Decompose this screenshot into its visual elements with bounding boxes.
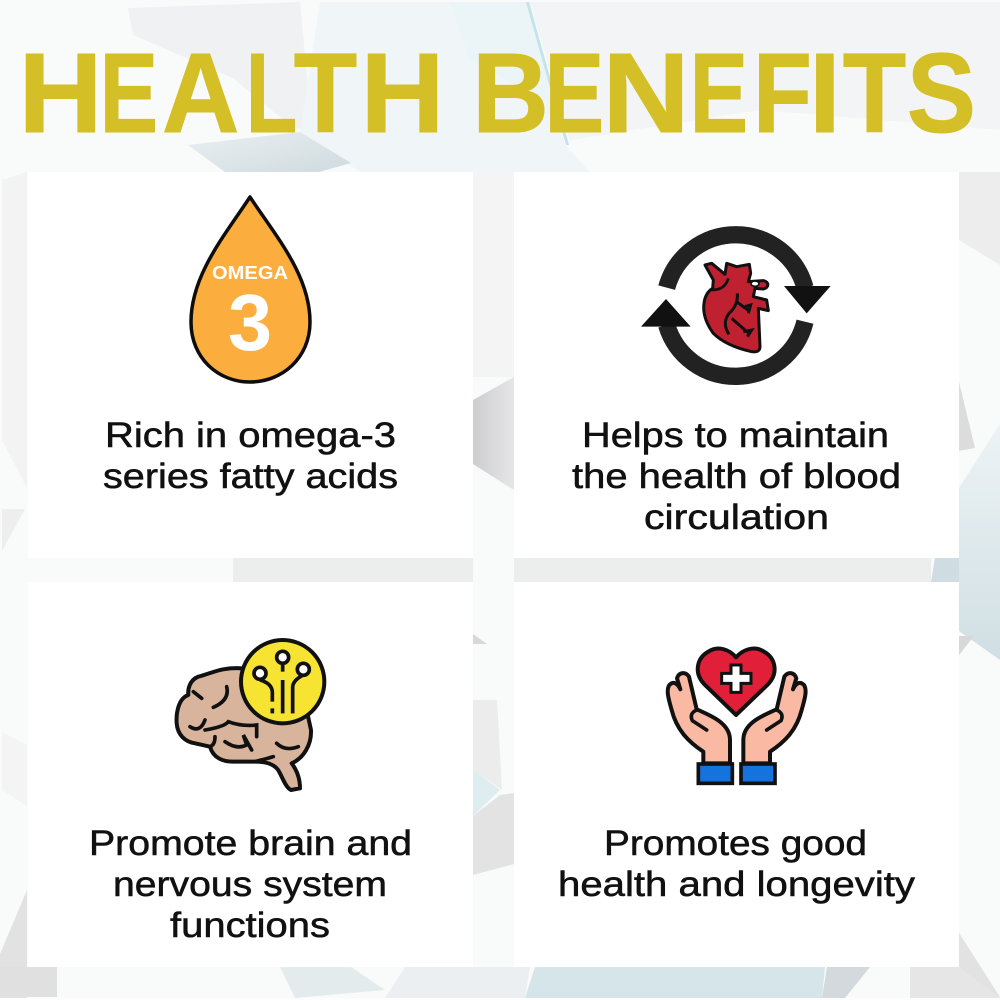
text: blood circulation: circulation: [644, 498, 829, 537]
title: L: [246, 30, 297, 156]
text: omega-3: [103, 416, 398, 496]
text: brain: nervous system: [113, 865, 387, 904]
icon: omega-3 drop: [191, 197, 310, 382]
text: blood circulation: [572, 416, 901, 537]
icon: omega-3 drop: OMEGA: [212, 263, 288, 283]
title: H: [360, 30, 444, 156]
icon: hands holding heart: [668, 649, 806, 783]
icon: omega-3 drop: 3: [228, 278, 272, 367]
title: H: [18, 30, 102, 156]
panel: blood circulation: [514, 172, 959, 558]
text: brain: Promote brain and: [89, 824, 412, 863]
text: omega-3: Rich in omega-3: [105, 416, 396, 455]
panel: longevity: [514, 582, 959, 967]
title: N: [602, 30, 690, 156]
title: T: [294, 30, 357, 156]
title: E: [544, 30, 604, 156]
text: longevity: health and longevity: [558, 865, 916, 904]
text: blood circulation: Helps to maintain: [582, 416, 889, 455]
panel: omega-3: [28, 172, 473, 558]
icon: heart with circulation arrows: [641, 235, 831, 376]
text: brain: [89, 824, 412, 945]
title: B: [472, 30, 549, 156]
text: longevity: [558, 824, 916, 904]
panel: brain: [28, 582, 473, 967]
title: T: [843, 30, 906, 156]
title: E: [100, 30, 158, 156]
title: I: [809, 30, 841, 156]
icon: brain with circuit badge: [177, 640, 324, 790]
title: E: [690, 30, 748, 156]
text: longevity: Promotes good: [604, 824, 867, 863]
title: S: [907, 30, 976, 156]
title: F: [753, 30, 812, 156]
text: omega-3: series fatty acids: [103, 457, 398, 496]
title: A: [162, 30, 239, 156]
text: brain: functions: [170, 906, 330, 945]
text: blood circulation: the health of blood: [572, 457, 901, 496]
